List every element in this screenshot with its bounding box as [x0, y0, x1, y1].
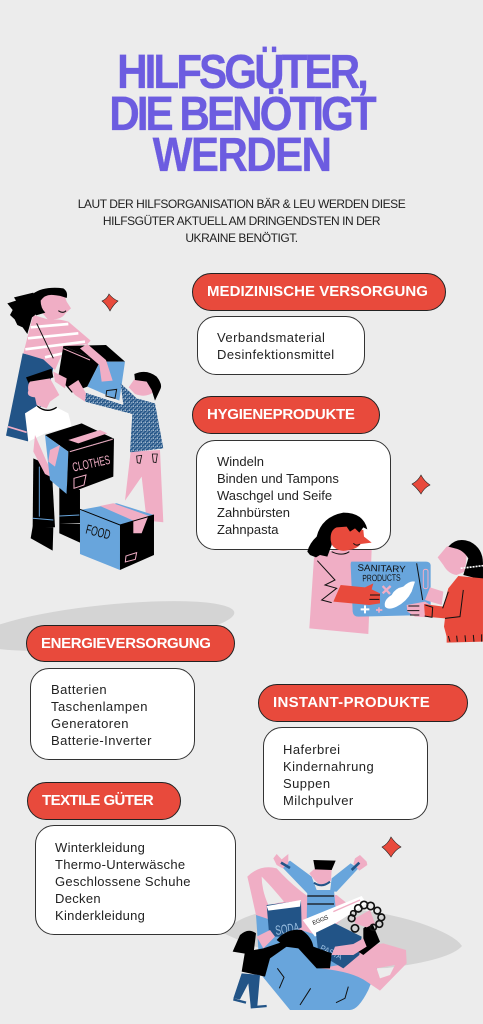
icon: red diamond 3 [382, 837, 401, 857]
heading: Medizinische Versorgung: MEDIZINISCHE VERSORGUNG [207, 283, 428, 300]
list: Instant-Produkte: Milchpulver [283, 793, 354, 808]
list: Energieversorgung: Batterie-Inverter [51, 733, 152, 748]
list: Energieversorgung: Taschenlampen [51, 699, 148, 714]
icon: red diamond 1 [102, 294, 118, 311]
heading: Textile Güter: TEXTILE GÜTER [42, 792, 153, 809]
list: Medizinische Versorgung: Verbandsmaterial [217, 330, 325, 345]
illustration: people with donation bag: PASTA [318, 943, 344, 962]
illustration: people with donation bag [233, 854, 407, 1010]
list: Medizinische Versorgung: Desinfektionsmittel [217, 347, 335, 362]
list: Textile Güter: Decken [55, 891, 101, 906]
list: Hygieneprodukte: Zahnpasta [217, 522, 278, 537]
list: Instant-Produkte: Suppen [283, 776, 331, 791]
illustration: people with donation bag: SODA [274, 920, 300, 938]
heading: Energieversorgung: ENERGIEVERSORGUNG [41, 635, 211, 652]
list: Energieversorgung [30, 668, 195, 760]
list: Medizinische Versorgung [197, 316, 365, 375]
list: Instant-Produkte [263, 727, 428, 820]
illustration: two women with sanitary products [307, 513, 483, 643]
list: Instant-Produkte: Kindernahrung [283, 759, 374, 774]
heading: Instant-Produkte: INSTANT-PRODUKTE [273, 694, 430, 711]
list: Textile Güter: Geschlossene Schuhe [55, 874, 191, 889]
illustration: people with donation bag: EGGS [312, 915, 330, 927]
intro text: UKRAINE BENÖTIGT. [185, 231, 298, 245]
title: DIE BENÖTIGT [109, 88, 374, 141]
illustration: two women with sanitary products: PRODUCTS [362, 573, 401, 583]
illustration: two women with sanitary products: SANITARY [357, 563, 407, 574]
heading: Energieversorgung [26, 625, 235, 662]
title: HILFSGÜTER, [117, 46, 366, 99]
list: Hygieneprodukte: Binden und Tampons [217, 471, 339, 486]
grey shadow ellipse bottom [223, 907, 462, 968]
heading: Hygieneprodukte: HYGIENEPRODUKTE [207, 406, 355, 423]
list: Energieversorgung: Batterien [51, 682, 107, 697]
list: Energieversorgung: Generatoren [51, 716, 129, 731]
list: Hygieneprodukte: Zahnbürsten [217, 505, 290, 520]
intro text: HILFSGÜTER AKTUELL AM DRINGENDSTEN IN DER [103, 214, 380, 228]
list: Instant-Produkte: Haferbrei [283, 742, 341, 757]
illustration: people carrying boxes: FOOD [84, 522, 112, 542]
illustration: people carrying boxes: CLOTHES [71, 453, 111, 475]
icon: red diamond 2 [412, 475, 430, 494]
title: WERDEN [153, 129, 330, 182]
intro text [78, 197, 406, 245]
list: Hygieneprodukte [196, 440, 391, 550]
list: Textile Güter [35, 825, 236, 935]
heading: Instant-Produkte [258, 684, 468, 722]
grey shadow ellipse left [0, 592, 236, 660]
list: Textile Güter: Thermo-Unterwäsche [55, 857, 185, 872]
heading: Textile Güter [27, 782, 181, 820]
heading: Hygieneprodukte [192, 396, 380, 434]
illustration: people carrying boxes [6, 288, 163, 570]
list: Hygieneprodukte: Windeln [217, 454, 264, 469]
list: Textile Güter: Winterkleidung [55, 840, 145, 855]
list: Hygieneprodukte: Waschgel und Seife [217, 488, 332, 503]
list: Textile Güter: Kinderkleidung [55, 908, 145, 923]
intro text: LAUT DER HILFSORGANISATION BÄR & LEU WERDEN DIESE [78, 197, 405, 211]
title [109, 46, 376, 182]
heading: Medizinische Versorgung [192, 273, 446, 311]
